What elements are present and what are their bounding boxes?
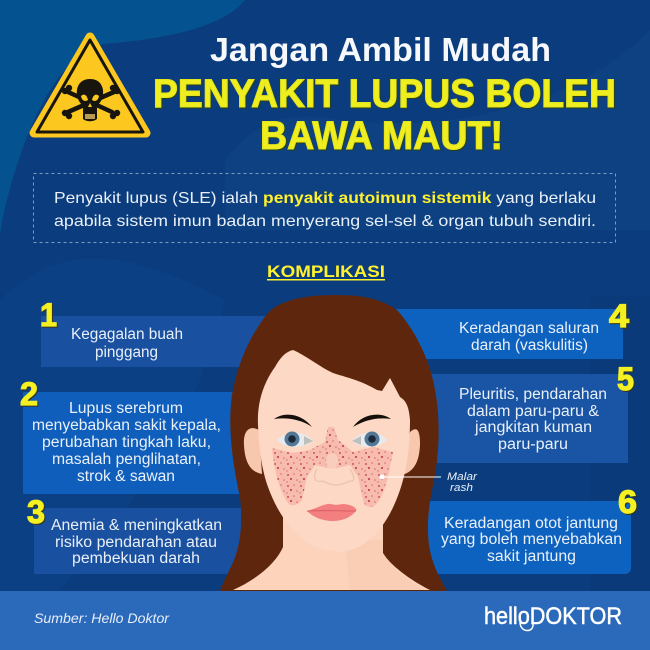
panel: complication 6: yang boleh menyebabkan bbox=[441, 531, 622, 548]
source text: Sumber: Hello Doktor bbox=[34, 610, 170, 626]
title: BAWA MAUT! bbox=[260, 114, 503, 158]
panel: complication 5: jangkitan kuman bbox=[474, 419, 592, 436]
title bbox=[153, 31, 616, 158]
hair bbox=[220, 295, 447, 591]
panel: complication 3: 3 bbox=[27, 494, 45, 530]
panel: complication 3 bbox=[27, 494, 244, 574]
ears bbox=[244, 428, 262, 474]
panel: complication 5 bbox=[425, 361, 634, 463]
eyes and brows bbox=[274, 415, 391, 447]
panel: complication 2: Lupus serebrum bbox=[69, 400, 183, 417]
panel: complication 2: perubahan tingkah laku, bbox=[42, 434, 211, 451]
panel: complication 6 bbox=[420, 484, 637, 574]
panel: complication 1: Kegagalan buah bbox=[71, 326, 183, 343]
panel: complication 5: 5 bbox=[617, 361, 634, 397]
panel: complication 2: masalah penglihatan, bbox=[52, 451, 201, 468]
icon: skull warning triangle bbox=[34, 37, 146, 133]
panel: complication 4 bbox=[395, 298, 629, 359]
panel: complication 2 bbox=[20, 376, 245, 494]
panel: complication 3: pembekuan darah bbox=[72, 550, 200, 567]
intro text box: Penyakit lupus (SLE) ialah penyakit autoimun sistemik yang berlaku bbox=[54, 190, 596, 207]
title: Jangan Ambil Mudah bbox=[210, 31, 551, 68]
panel: complication 4: Keradangan saluran bbox=[459, 320, 599, 337]
panel: complication 1: 1 bbox=[40, 297, 57, 333]
nose bbox=[315, 469, 354, 485]
callout: malar rash: Malar bbox=[447, 471, 478, 483]
panel: complication 4: darah (vaskulitis) bbox=[471, 337, 588, 354]
panel: complication 1: pinggang bbox=[95, 344, 158, 361]
panel: complication 1 bbox=[40, 297, 270, 367]
title: PENYAKIT LUPUS BOLEH bbox=[153, 72, 616, 116]
panel: complication 6: Keradangan otot jantung bbox=[444, 515, 618, 532]
lips bbox=[307, 504, 356, 521]
intro text box bbox=[34, 174, 616, 242]
panel: complication 3: Anemia & meningkatkan bbox=[51, 517, 222, 534]
panel: complication 3: risiko pendarahan atau bbox=[55, 534, 217, 551]
panel: complication 2: strok & sawan bbox=[77, 468, 175, 485]
intro text box: apabila sistem imun badan menyerang sel-sel & organ tubuh sendiri. bbox=[54, 213, 596, 230]
panel: complication 6: 6 bbox=[618, 484, 637, 520]
face bbox=[258, 350, 410, 552]
panel: complication 5: dalam paru-paru & bbox=[467, 403, 600, 420]
panel: complication 5: paru-paru bbox=[498, 436, 568, 453]
neck and shoulders bbox=[233, 515, 430, 590]
panel: complication 2: 2 bbox=[20, 376, 38, 412]
callout: malar rash: rash bbox=[450, 482, 473, 494]
panel: complication 6: sakit jantung bbox=[487, 548, 576, 565]
footer bar bbox=[0, 591, 650, 650]
logo: helloDOKTOR: helloDOKTOR bbox=[484, 603, 622, 630]
illustration: woman's face with malar rash bbox=[220, 295, 447, 591]
panel: complication 2: menyebabkan sakit kepala, bbox=[32, 417, 221, 434]
panel: complication 4: 4 bbox=[609, 298, 629, 334]
callout: malar rash bbox=[380, 471, 478, 494]
malar rash bbox=[272, 427, 393, 507]
heading: komplikasi: KOMPLIKASI bbox=[267, 262, 385, 281]
panel: complication 5: Pleuritis, pendarahan bbox=[459, 386, 607, 403]
